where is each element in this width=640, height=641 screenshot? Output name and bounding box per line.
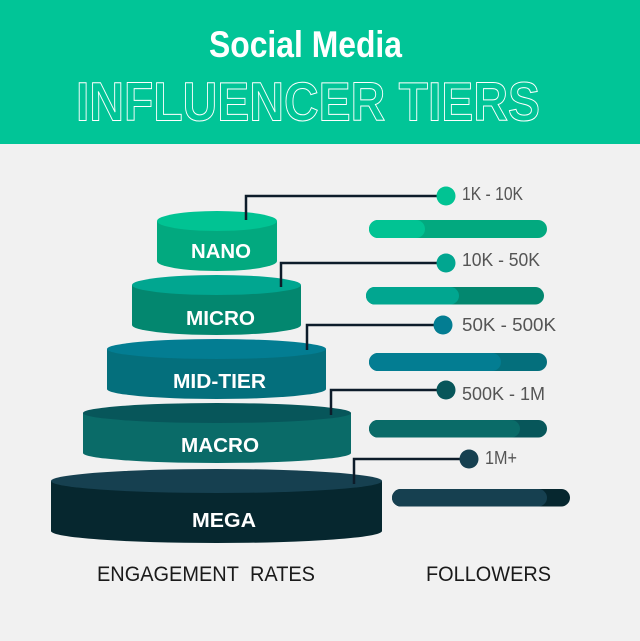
bar: Nano engagement	[369, 220, 547, 238]
tier: Macro cylinder	[83, 403, 351, 463]
footer label: Engagement Rates: ENGAGEMENT RATES	[97, 563, 315, 586]
label: Micro: MICRO	[186, 308, 255, 330]
leader: Micro range	[281, 254, 456, 287]
title: Influencer Tiers: INFLUENCER TIERS	[76, 70, 540, 132]
title: Social Media: Social Media	[209, 24, 402, 65]
follower range: 500K - 1M: 500K - 1M	[462, 384, 545, 404]
leader: Macro range	[331, 380, 456, 415]
label: Mid-Tier: MID-TIER	[173, 371, 267, 393]
bar: Mid-Tier engagement	[369, 353, 547, 371]
follower range: 1M+: 1M+	[485, 448, 517, 468]
bar: Micro engagement	[366, 287, 544, 304]
leader: Mid-Tier range	[307, 316, 452, 350]
follower range: 50K - 500K: 50K - 500K	[462, 315, 556, 335]
tier: Mega cylinder	[51, 469, 382, 543]
tier: Mid-Tier cylinder	[107, 339, 326, 399]
leader: Nano range	[246, 186, 456, 220]
header banner	[0, 0, 640, 144]
tier: Micro cylinder	[132, 275, 301, 335]
bar: Macro engagement	[369, 420, 547, 438]
follower range: 1K - 10K: 1K - 10K	[462, 184, 523, 204]
footer label: Followers: FOLLOWERS	[426, 563, 551, 586]
label: Mega: MEGA	[192, 510, 256, 532]
leader: Mega range	[354, 450, 478, 484]
label: Macro: MACRO	[181, 435, 259, 457]
label: Nano: NANO	[191, 241, 251, 263]
tier: Nano cylinder	[157, 211, 277, 271]
follower range: 10K - 50K: 10K - 50K	[462, 250, 540, 270]
bar: Mega engagement	[392, 489, 570, 506]
